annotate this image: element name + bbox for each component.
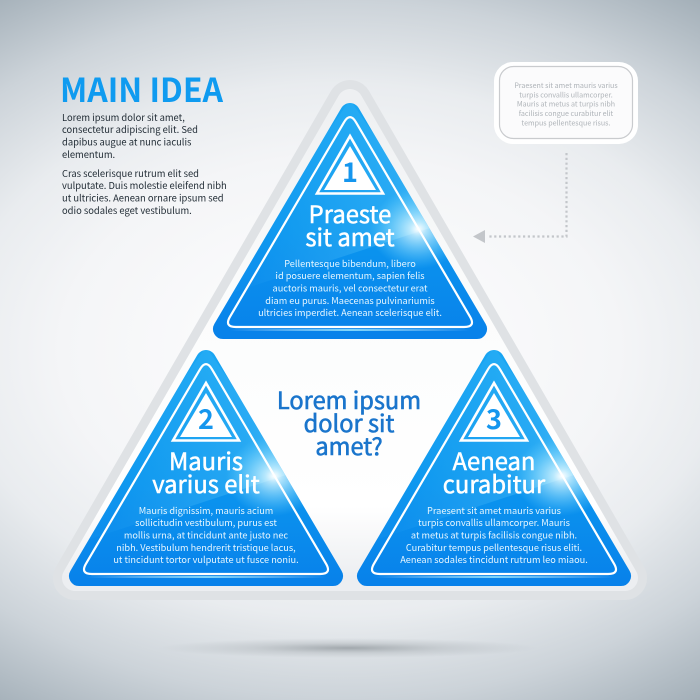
- center question: Lorem ipsum: [277, 382, 421, 416]
- number 1: 1: [342, 151, 358, 190]
- intro text block: Cras scelerisque rutrum elit sed: [62, 166, 199, 180]
- body 1: [258, 256, 442, 319]
- intro text block: ut ultricies. Aenean ornare ipsum sed: [62, 190, 224, 204]
- body 2: mollis urna, at tincidunt ante justo nec: [124, 528, 288, 542]
- center question: dolor sit: [304, 405, 394, 439]
- body 3: Aenean sodales tincidunt rutrum leo miaou.: [400, 552, 588, 566]
- title 2: Mauris: [169, 442, 243, 477]
- panel: triangle 3: [354, 347, 634, 586]
- callout box: Praesent sit amet mauris varius: [514, 81, 618, 91]
- body 1: Pellentesque bibendum, libero: [284, 256, 416, 270]
- number 3: 3: [486, 398, 502, 437]
- body 3: turpis convallis ullamcorper. Mauris: [418, 515, 570, 529]
- body 3: at metus at turpis facilisis congue nibh.: [411, 528, 577, 542]
- title 3: curabitur: [443, 465, 546, 500]
- outer triangle frame: [75, 102, 625, 578]
- intro text block: elementum.: [62, 147, 115, 161]
- body 2: sollicitudin vestibulum, purus est: [135, 515, 277, 529]
- heading: main idea: MAIN IDEA: [60, 64, 224, 112]
- body 1: diam eu purus. Maecenas pulvinariumis: [265, 293, 435, 307]
- panel: triangle 2: [66, 347, 346, 586]
- body 2: [113, 503, 299, 566]
- intro text block: vulputate. Duis molestie eleifend nibh: [62, 178, 227, 192]
- callout box: [494, 62, 638, 144]
- title 3: [443, 442, 546, 500]
- body 1: auctoris mauris, vel consectetur erat: [273, 280, 428, 294]
- intro text block: dapibus augue at nunc iaculis: [62, 134, 192, 148]
- center question: [277, 382, 421, 462]
- intro text block: Lorem ipsum dolor sit amet,: [62, 110, 185, 124]
- arrow: callout to triangle 1: [473, 153, 566, 243]
- body 2: nibh. Vestibulum hendrerit tristique lacus,: [116, 540, 296, 554]
- floor shadow: [158, 638, 538, 658]
- body 3: [400, 503, 588, 566]
- callout box: tempus pellentesque risus.: [522, 118, 610, 128]
- panel: triangle 1: [210, 100, 490, 339]
- title 1: Praeste: [309, 195, 391, 230]
- body 2: Mauris dignissim, mauris acium: [139, 503, 273, 517]
- callout box: turpis convallis ullamcorper.: [519, 90, 613, 100]
- title 2: varius elit: [152, 465, 260, 500]
- body 3: Praesent sit amet mauris varius: [427, 503, 561, 517]
- title 1: sit amet: [305, 218, 395, 253]
- callout box: facilisis congue curabitur elit: [519, 109, 614, 119]
- intro text block: [62, 110, 227, 217]
- intro text block: consectetur adipiscing elit. Sed: [62, 122, 198, 136]
- intro text block: odio sodales eget vestibulum.: [62, 203, 192, 217]
- title 1: [305, 195, 395, 253]
- number 2: 2: [198, 398, 214, 437]
- title 3: Aenean: [453, 442, 535, 477]
- callout box: Mauris at metus at turpis nibh: [517, 100, 615, 110]
- body 3: Curabitur tempus pellentesque risus eliti.: [406, 540, 582, 554]
- center question: amet?: [315, 428, 383, 462]
- body 1: id posuere elementum, sapien felis: [275, 268, 425, 282]
- title 2: [152, 442, 260, 500]
- body 2: ut tincidunt tortor vulputate ut fusce noniu.: [113, 552, 299, 566]
- body 1: ultricies imperdiet. Aenean scelerisque elit.: [258, 305, 442, 319]
